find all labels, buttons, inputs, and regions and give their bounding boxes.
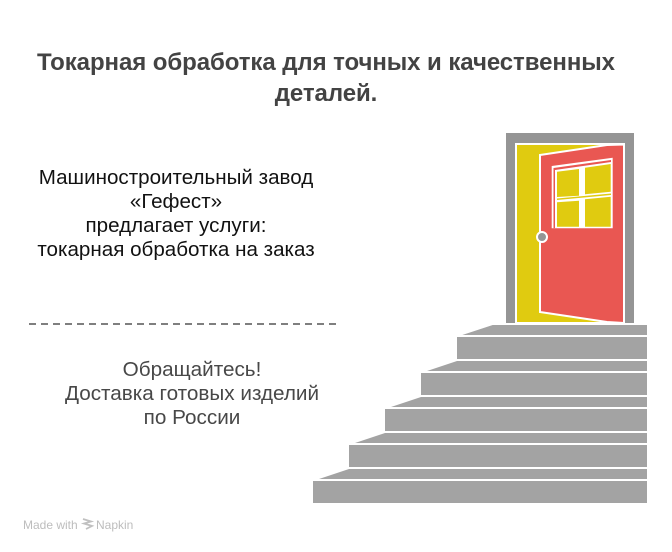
doorway xyxy=(516,144,624,323)
step 4 xyxy=(349,433,647,467)
title: деталей. xyxy=(275,80,377,107)
icon: napkin logo xyxy=(83,519,92,529)
title xyxy=(37,49,615,107)
text block: company offer: предлагает услуги: xyxy=(86,214,266,237)
watermark xyxy=(23,518,133,532)
text block: company offer: «Гефест» xyxy=(130,190,222,213)
text block: company offer xyxy=(37,166,315,261)
step 5 xyxy=(313,469,647,503)
text block: company offer: токарная обработка на заказ xyxy=(37,238,315,261)
door leaf xyxy=(540,144,624,323)
watermark: Made with xyxy=(23,518,78,532)
stairs xyxy=(313,325,647,503)
text block: call to action: по России xyxy=(144,406,240,429)
watermark: Napkin xyxy=(96,518,133,532)
title: Токарная обработка для точных и качественных xyxy=(37,49,615,76)
step 3 xyxy=(385,397,647,431)
text block: call to action: Обращайтесь! xyxy=(123,358,261,381)
divider xyxy=(29,323,336,325)
door knob xyxy=(537,232,547,242)
step 1 xyxy=(457,325,647,359)
door window xyxy=(552,158,613,228)
icon: door xyxy=(506,133,634,323)
text block: call to action xyxy=(65,358,319,429)
door frame xyxy=(506,133,634,323)
text block: company offer: Машиностроительный завод xyxy=(39,166,313,189)
step 2 xyxy=(421,361,647,395)
text block: call to action: Доставка готовых изделий xyxy=(65,382,319,405)
